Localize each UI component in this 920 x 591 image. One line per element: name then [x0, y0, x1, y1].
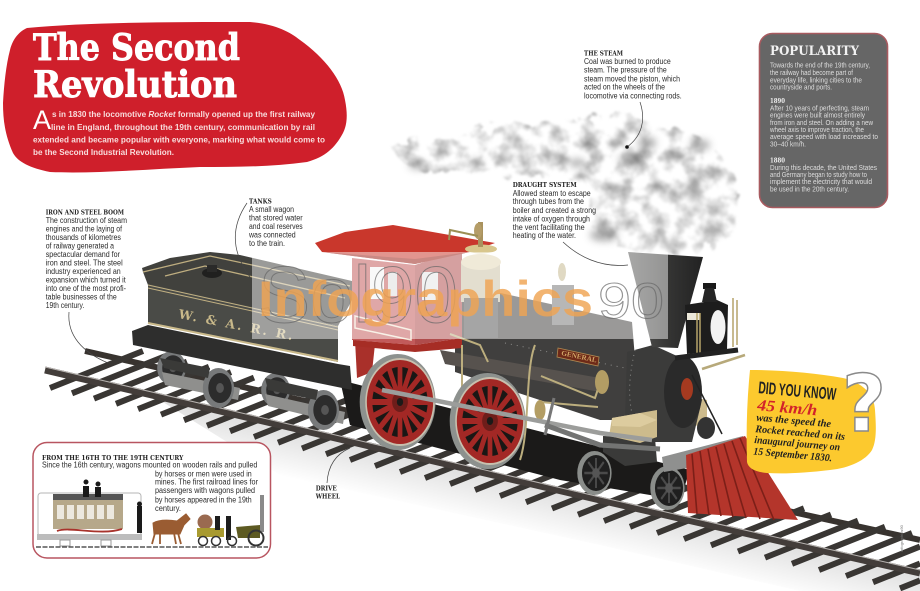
valves: [534, 370, 609, 420]
tender: [132, 252, 352, 430]
panel: popularity: [760, 34, 888, 208]
callout: iron and steel boom: The construction of steam: [46, 216, 127, 225]
history text: by horses appeared in the 19th: [155, 496, 252, 505]
intro text: A: [33, 105, 51, 135]
popularity text: implement the electricity that would: [770, 179, 872, 186]
popularity text: and Germany began to study how to: [770, 172, 867, 179]
gold pipes: [450, 334, 601, 460]
underframe shadow: [340, 380, 690, 500]
tender top: [142, 252, 352, 326]
popularity text: After 10 years of perfecting, steam: [770, 106, 869, 113]
history text: Since the 16th century, wagons mounted on wooden rails and pulled: [42, 461, 257, 470]
callout: draught system: Allowed steam to escape: [513, 189, 591, 198]
popularity text: 1880: [770, 157, 785, 165]
callout: the steam: acted on the wheels of the: [584, 83, 665, 92]
note text: [752, 378, 849, 465]
callout: iron and steel boom: spectacular demand for: [46, 250, 120, 259]
illustration: horse: [152, 514, 190, 544]
intro text: be the Second Industrial Revolution.: [33, 147, 174, 157]
intro text: s in 1830 the locomotive Rocket formally opened up the first railway: [52, 109, 315, 119]
drive wheels: [360, 354, 526, 469]
callout: iron and steel boom: iron and steel. The steel: [46, 259, 123, 268]
callout: iron and steel boom: industry experienced an: [46, 267, 121, 276]
illustration: horse tram: [37, 480, 142, 546]
popularity text: countryside and ports.: [770, 85, 832, 92]
callout: iron and steel boom: IRON AND STEEL BOOM: [46, 208, 124, 216]
panel: the second revolution: [3, 22, 347, 172]
watermark: [252, 250, 668, 339]
callout: draught system: through tubes from the: [513, 197, 584, 206]
front wheels: [577, 451, 685, 510]
history text: mines. The first railroad lines for: [155, 478, 258, 487]
callout: drive wheel: [315, 448, 350, 501]
intro text: extended and became popular with everyone, marking what would come to: [33, 134, 325, 144]
cab windows: [370, 267, 384, 299]
cylinder and tan box: [603, 410, 657, 466]
history text: [42, 461, 258, 513]
popularity text: average speed with load increased to: [770, 134, 878, 141]
popularity text: wheel axis to improve traction, the: [769, 127, 864, 134]
history heading: FROM THE 16TH TO THE 19TH CENTURY: [42, 454, 184, 462]
cab roof: [315, 225, 495, 264]
illustration: wagon and early locomotive: [197, 495, 264, 546]
popularity text: [769, 62, 878, 194]
note text: inaugural journey on: [754, 435, 841, 454]
boiler: [440, 283, 640, 420]
panel: from the 16th to the 19th century: [33, 442, 270, 558]
popularity text: 30–40 km/h.: [770, 142, 806, 149]
rear lamp bracket: [692, 397, 715, 439]
callout: the steam: THE STEAM: [584, 50, 623, 58]
callout: iron and steel boom: expansion which turned it: [46, 275, 126, 284]
note text: DID YOU KNOW: [758, 378, 838, 404]
tender base: [132, 325, 352, 390]
callout: iron and steel boom: engines and the laying of: [46, 225, 123, 234]
popularity text: everyday life, linking cities to the: [770, 77, 862, 84]
popularity text: engines were built almost entirely: [770, 113, 866, 120]
callout: the steam: [584, 50, 682, 149]
callout: iron and steel boom: [46, 208, 127, 363]
cowcatcher: [686, 436, 798, 520]
locomotive: [132, 222, 798, 520]
watermark outline lettering: [258, 250, 664, 339]
callout: iron and steel boom: into one of the most profi-: [46, 284, 126, 293]
callout: draught system: heating of the water.: [513, 231, 576, 240]
railway track: [45, 351, 920, 588]
watermark outline lettering: 90: [598, 273, 664, 329]
callout: the steam: Coal was burned to produce: [584, 57, 671, 66]
note text: was the speed the: [756, 413, 832, 430]
callout: tanks: [235, 197, 303, 277]
callout: tanks: that stored water: [249, 213, 303, 222]
watermark outline lettering: Sol90: [258, 250, 458, 339]
sand dome: [552, 263, 574, 325]
popularity text: the railway had become part of: [770, 70, 853, 77]
callout: the steam: locomotive via connecting rods.: [584, 91, 682, 100]
note text: 15 September 1830.: [753, 447, 833, 464]
callout: draught system: intake of oxygen through: [513, 214, 590, 223]
callout: tanks: and coal reserves: [249, 222, 303, 231]
tender lettering: W. & A. R. R.: [176, 306, 294, 343]
title: [33, 27, 240, 106]
smoke cloud: [392, 114, 736, 254]
question mark: ?: [842, 360, 886, 450]
popularity text: Towards the end of the 19th century,: [770, 62, 870, 69]
headlamp: [675, 283, 745, 369]
callout: drive wheel: WHEEL: [315, 493, 340, 501]
history text: by horses or men were used in: [155, 469, 252, 478]
track reflection: [150, 394, 920, 591]
callout: did you know: [747, 360, 886, 473]
popularity heading: POPULARITY: [770, 44, 860, 59]
tender truck wheels: [157, 351, 345, 430]
callout: drive wheel: DRIVE: [316, 485, 337, 493]
connecting rod: [382, 390, 660, 449]
callout: tanks: TANKS: [249, 197, 272, 205]
intro text: [33, 105, 325, 157]
callout: the steam: steam. The pressure of the: [584, 66, 667, 75]
title: Revolution: [33, 64, 237, 106]
history text: passengers with wagons pulled: [155, 486, 255, 495]
note text: 45 km/h: [756, 397, 818, 419]
popularity text: 1890: [770, 97, 785, 105]
popularity text: from iron and steel. On adding a new: [770, 120, 873, 127]
callout: iron and steel boom: thousands of kilometres: [46, 233, 121, 242]
credit: infographics90: [899, 524, 904, 552]
popularity text: During this decade, the United States: [770, 165, 878, 172]
callout: iron and steel boom: 19th century.: [46, 301, 84, 310]
callout: the steam: steam moved the piston, which: [584, 74, 680, 83]
callout: draught system: DRAUGHT SYSTEM: [513, 181, 577, 189]
cab supports: [355, 340, 375, 378]
callout: tanks: was connected: [248, 230, 296, 239]
name plate: GENERAL: [561, 349, 598, 365]
cab: [315, 225, 495, 352]
note text: Rocket reached on its: [754, 424, 845, 443]
callout: tanks: A small wagon: [249, 205, 294, 214]
yellow note: [747, 370, 876, 473]
steam dome: [449, 222, 501, 338]
popularity text: be used in the 20th century.: [770, 187, 849, 194]
callout: draught system: the vent facilitating the: [513, 223, 585, 232]
callout: iron and steel boom: table businesses of the: [46, 292, 117, 301]
callout: tanks: to the train.: [249, 239, 285, 248]
watermark band: [252, 252, 668, 339]
callout: iron and steel boom: of railway generated a: [46, 242, 114, 251]
pilot deck: [662, 436, 743, 472]
cab walls: [352, 258, 415, 345]
callout: draught system: [513, 181, 628, 265]
tender side: [148, 284, 338, 362]
watermark orange lettering: Infographics: [258, 271, 593, 327]
callout: draught system: boiler and created a strong: [513, 206, 596, 215]
smokestack: [628, 252, 703, 348]
smokebox: [625, 345, 722, 442]
illustration: rail: [36, 546, 268, 548]
intro text: line in England, throughout the 19th century, communication by rail: [51, 122, 315, 132]
title: The Second: [33, 27, 240, 69]
history text: century.: [155, 504, 181, 513]
